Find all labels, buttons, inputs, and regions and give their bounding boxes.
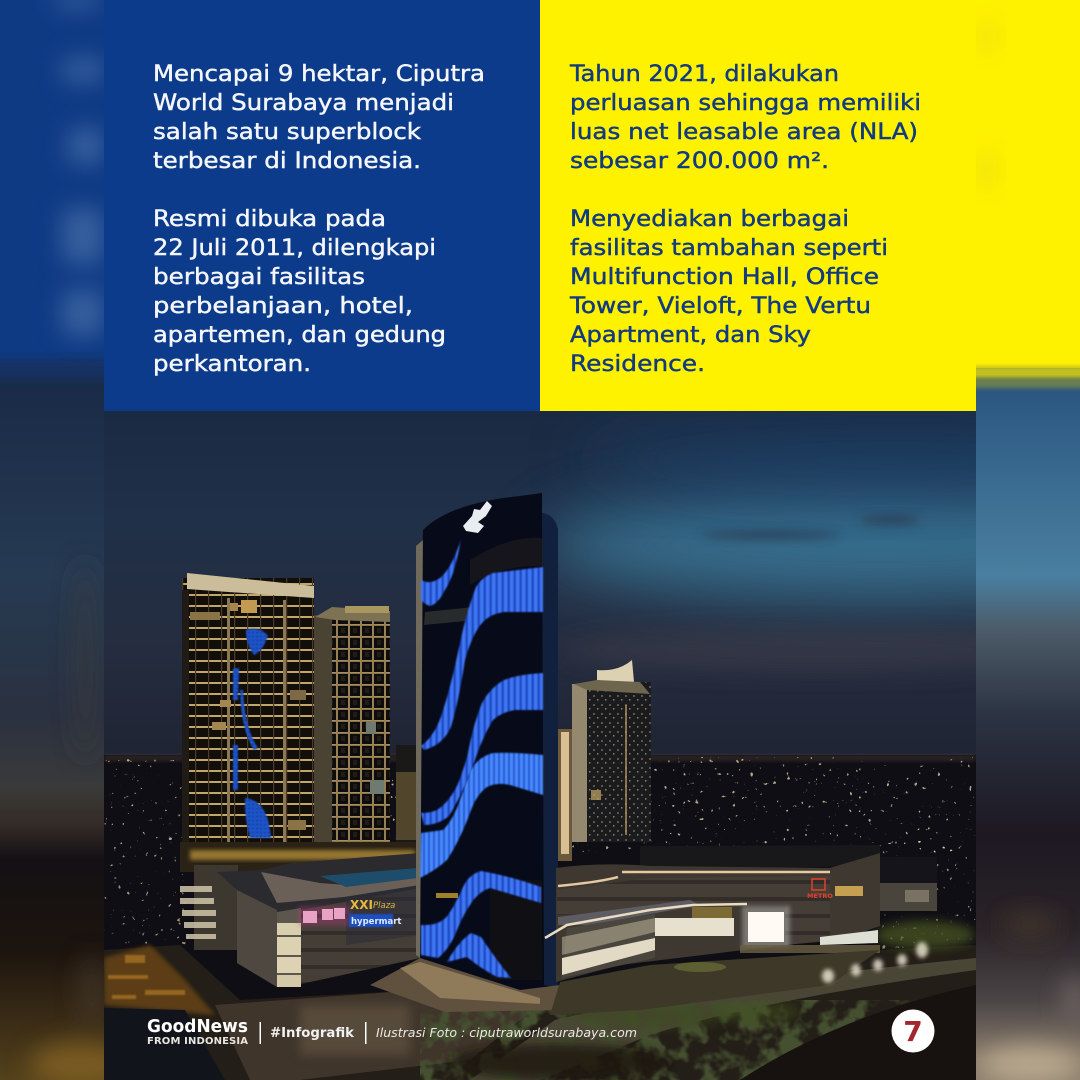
text: opening paragraph: apartemen, dan gedung: [153, 323, 446, 348]
text: expansion paragraph: sebesar 200.000 m².: [570, 149, 829, 174]
blurred background: left strip: [0, 0, 130, 1080]
distant city with scattered lights: [104, 754, 976, 1000]
LED wave 5: [421, 871, 541, 958]
text: opening paragraph: [153, 207, 446, 377]
text: facilities paragraph: fasilitas tambahan seperti: [570, 236, 888, 261]
footer credit bar: [148, 1018, 636, 1044]
tower: left apartment block: [182, 573, 314, 850]
icon: tower logo: [463, 501, 492, 533]
tower: middle apartment block: [314, 606, 416, 850]
mall: left podium with signage: [217, 853, 420, 987]
mall: left podium with signage: XXI: [350, 898, 373, 912]
page number badge: 7: [903, 1015, 923, 1048]
text: facilities paragraph: Tower, Vieloft, The Vertu: [569, 294, 871, 319]
divider: [260, 1022, 261, 1044]
text: expansion paragraph: perluasan sehingga memiliki: [570, 91, 921, 116]
text: opening paragraph: perbelanjaan, hotel,: [153, 294, 413, 319]
text: superblock paragraph: World Surabaya menjadi: [153, 91, 454, 116]
text: superblock paragraph: salah satu superblock: [153, 120, 421, 145]
text: opening paragraph: perkantoran.: [153, 352, 311, 377]
mall: left podium with signage: Plaza: [373, 901, 395, 911]
mall: right curved wing: METRO: [807, 892, 833, 900]
text: opening paragraph: Resmi dibuka pada: [153, 207, 386, 232]
panel: photo of Ciputra World Surabaya: [104, 411, 976, 1080]
text: superblock paragraph: Mencapai 9 hektar, Ciputra: [153, 62, 485, 87]
label: hashtag: #Infografik: [270, 1026, 354, 1041]
LED wave 1: [421, 539, 461, 606]
LED wave 6: [447, 933, 511, 978]
mall: right curved wing: [545, 845, 880, 982]
panel: blue text block: [104, 0, 540, 411]
page number badge: [892, 1010, 934, 1052]
text: superblock paragraph: [153, 62, 485, 174]
main tower with LED waves: [416, 493, 558, 990]
LED wave 4: [420, 753, 543, 878]
podium glow beneath towers: [180, 842, 420, 950]
divider: [365, 1022, 366, 1044]
tower: right residence: [558, 660, 651, 861]
blurred background: right strip: [970, 0, 1080, 1080]
sky: [104, 411, 976, 755]
mall: left podium with signage: hypermart: [351, 917, 401, 927]
text: facilities paragraph: Residence.: [570, 352, 705, 377]
text: facilities paragraph: Multifunction Hall, Office: [570, 265, 879, 290]
text: expansion paragraph: luas net leasable area (NLA): [570, 120, 918, 145]
text: facilities paragraph: [569, 207, 888, 377]
text: opening paragraph: berbagai fasilitas: [153, 265, 365, 290]
LED wave 2: [421, 567, 543, 750]
entrance plaza and parking: [370, 942, 928, 1015]
text: expansion paragraph: [569, 62, 921, 174]
label: photo credit: Ilustrasi Foto : ciputraworldsurabaya.com: [376, 1026, 637, 1040]
panel: yellow text block: [540, 0, 976, 411]
text: expansion paragraph: Tahun 2021, dilakukan: [569, 62, 839, 87]
brand: GoodNews from Indonesia: [148, 1018, 248, 1044]
foreground ground and roads: [104, 945, 976, 1080]
text: facilities paragraph: Menyediakan berbagai: [570, 207, 849, 232]
far right buildings: [875, 857, 975, 949]
text: opening paragraph: 22 Juli 2011, dilengkapi: [153, 236, 436, 261]
brand: GoodNews from Indonesia: GoodNews: [147, 1016, 248, 1037]
text: superblock paragraph: terbesar di Indonesia.: [153, 149, 421, 174]
LED wave 3: [421, 673, 543, 825]
brand: GoodNews from Indonesia: FROM INDONESIA: [147, 1036, 248, 1047]
text: facilities paragraph: Apartment, dan Sky: [570, 323, 811, 348]
